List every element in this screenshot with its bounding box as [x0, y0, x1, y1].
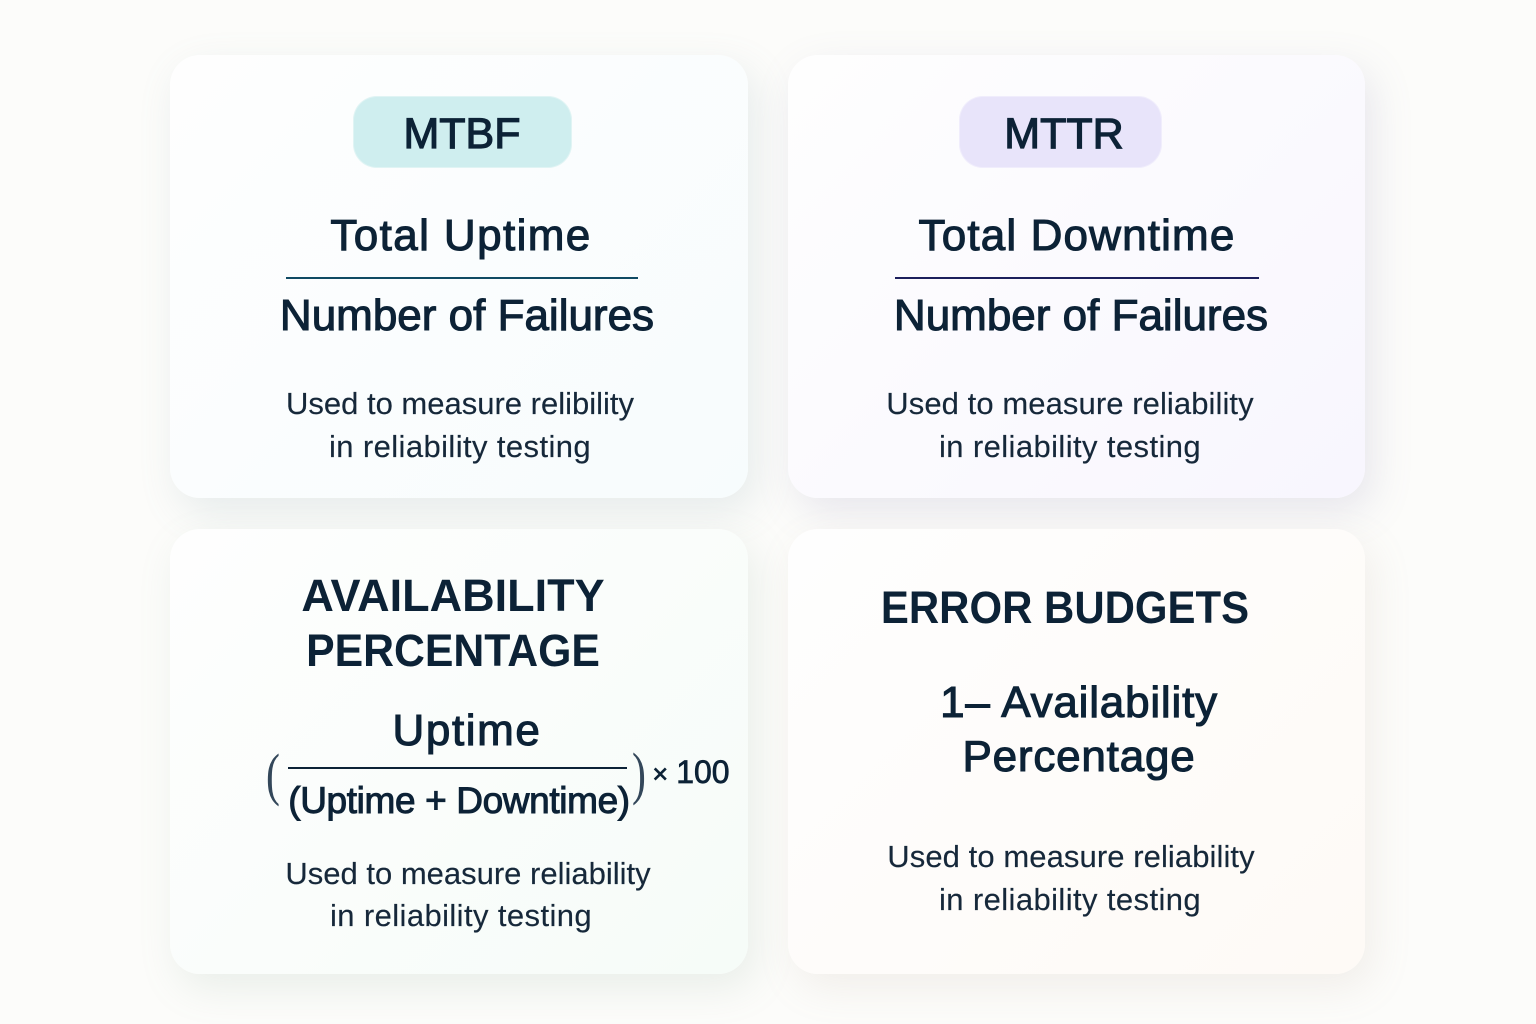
MTTR fraction line [895, 277, 1259, 279]
right parenthesis: ) [632, 741, 646, 806]
MTTR label: MTTR [1004, 110, 1124, 158]
availability denominator: (Uptime + Downtime) [288, 780, 630, 821]
MTBF denominator: Number of Failures [280, 291, 654, 340]
MTTR badge [959, 96, 1162, 168]
panel: MTTR [788, 55, 1365, 498]
error budgets description: Used to measure reliability [887, 839, 1255, 874]
error budgets formula: 1– Availability [940, 678, 1218, 727]
availability numerator: Uptime [393, 706, 541, 755]
availability heading: AVAILABILITY [301, 570, 605, 621]
left parenthesis: ( [266, 742, 280, 807]
MTBF numerator: Total Uptime [330, 211, 592, 260]
MTBF description: Used to measure relibility [286, 386, 634, 421]
panel: error budgets [788, 529, 1365, 974]
MTBF description: in reliability testing [329, 429, 591, 464]
times 100: ×100 [652, 754, 730, 790]
availability description: in reliability testing [330, 898, 592, 933]
availability description: Used to measure reliability [285, 856, 651, 891]
availability description [285, 856, 651, 933]
error budgets description [887, 839, 1255, 917]
MTBF label: MTBF [403, 110, 521, 158]
error budgets formula [940, 678, 1218, 781]
availability heading: PERCENTAGE [306, 625, 600, 676]
MTBF fraction line [286, 277, 638, 279]
MTTR description [886, 386, 1254, 464]
error budgets heading: ERROR BUDGETS [881, 582, 1249, 633]
MTBF description [286, 386, 634, 464]
error budgets description: in reliability testing [939, 882, 1201, 917]
panel: availability percentage [170, 529, 748, 974]
availability heading [301, 570, 605, 676]
MTTR denominator: Number of Failures [894, 291, 1268, 340]
MTTR numerator: Total Downtime [919, 211, 1235, 260]
error budgets formula: Percentage [962, 732, 1196, 781]
MTTR description: Used to measure reliability [886, 386, 1254, 421]
MTTR description: in reliability testing [939, 429, 1201, 464]
MTBF badge [353, 96, 572, 168]
panel: MTBF [170, 55, 748, 498]
availability fraction line [288, 767, 627, 769]
